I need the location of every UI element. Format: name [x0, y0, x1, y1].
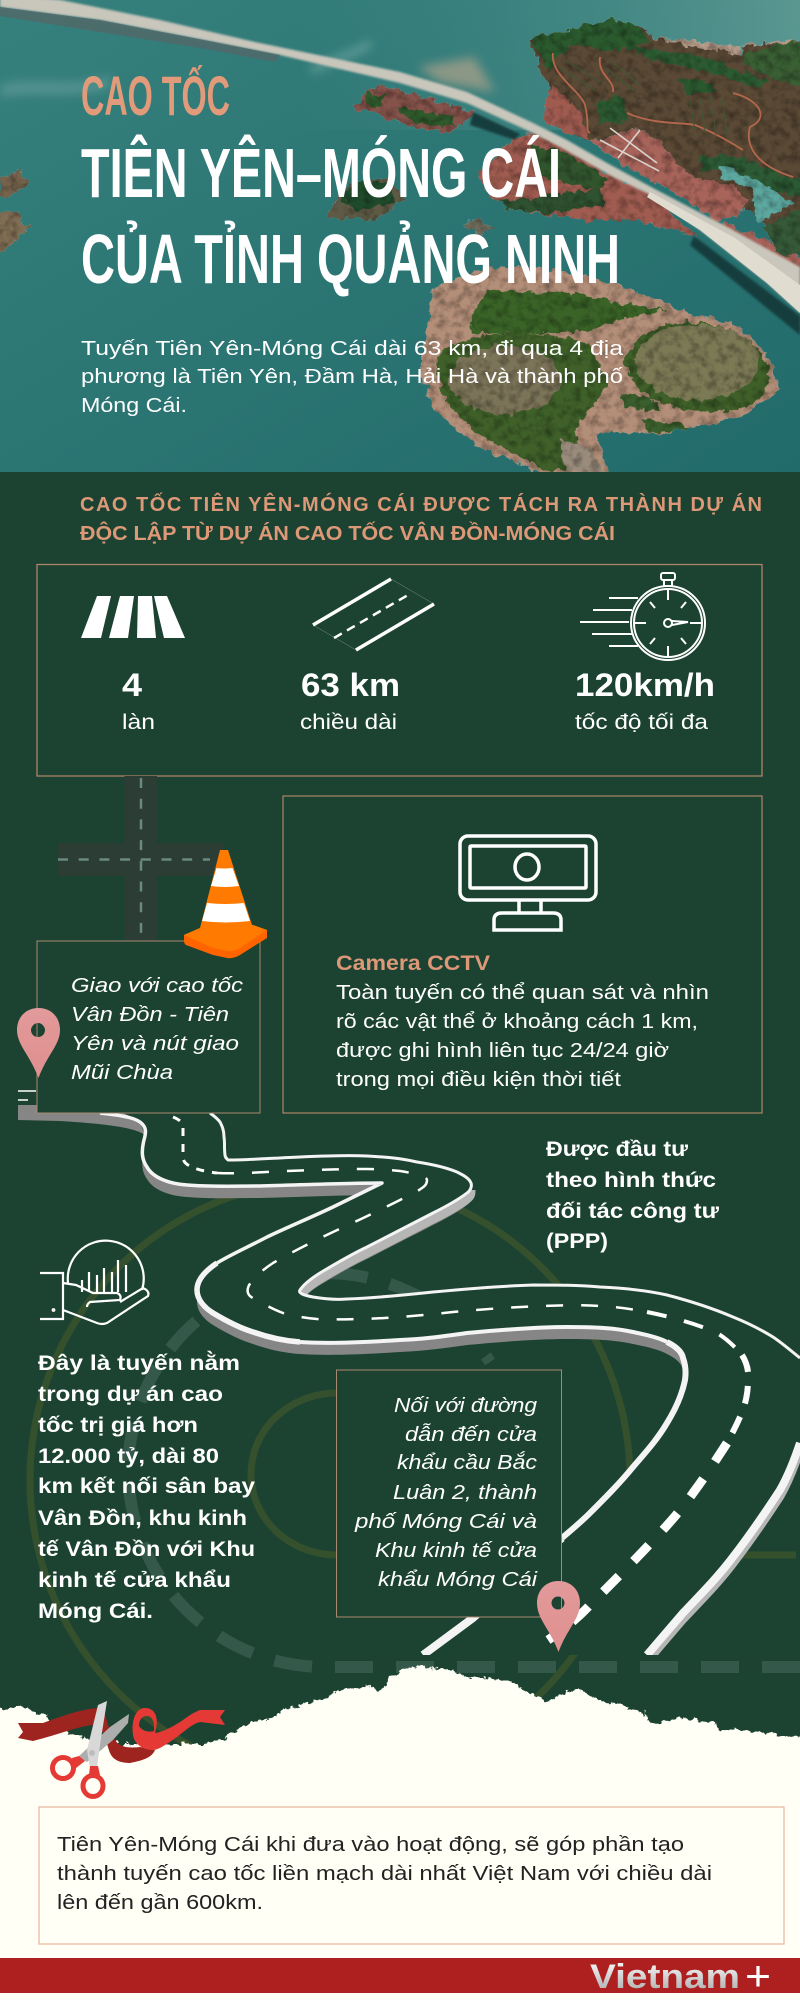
stat: lanes: làn: [122, 711, 155, 734]
hero intro text: Tuyến Tiên Yên-Móng Cái dài 63 km, đi qua 4 địa: [81, 338, 624, 360]
lower red island: [477, 133, 697, 237]
footer bar with logo: Vietnam: [590, 1958, 740, 1996]
panel: border gate connection: Khu kinh tế cửa: [375, 1540, 537, 1562]
panel: key figures: [37, 564, 762, 776]
project description: tế Vân Đồn với Khu: [38, 1538, 255, 1561]
footer bar with logo: +: [745, 1952, 771, 1999]
project description: trong dự án cao: [38, 1383, 223, 1406]
bridge deck: [0, 0, 800, 313]
road centre line: [173, 1117, 748, 1640]
hero intro text: Móng Cái.: [81, 395, 187, 417]
section heading: CAO TỐC TIÊN YÊN-MÓNG CÁI ĐƯỢC TÁCH RA THÀNH DỰ ÁN: [80, 492, 762, 516]
scissors: [52, 1701, 129, 1796]
decorative background circles and dashed ring: [30, 1180, 800, 1780]
land plot marks: [600, 128, 659, 171]
project description: 12.000 tỷ, dài 80: [38, 1445, 219, 1468]
panel: interchange note: [37, 941, 260, 1113]
panel: border gate connection: phố Móng Cái và: [354, 1511, 537, 1533]
road start lane ticks: [18, 1091, 36, 1100]
panel: border gate connection: khẩu Móng Cái: [378, 1569, 538, 1591]
panel: conclusion: [39, 1807, 784, 1944]
winding road illustration: [18, 1072, 800, 1667]
panel: border gate connection: dẫn đến cửa: [405, 1423, 537, 1446]
panel: border gate connection: Luân 2, thành: [393, 1482, 537, 1504]
road left start band: [18, 1110, 145, 1135]
icon: stopwatch: [580, 573, 705, 660]
icon: start location pin: [17, 1008, 60, 1078]
hero title: TIÊN YÊN–MÓNG CÁI: TIÊN YÊN–MÓNG CÁI: [81, 133, 561, 212]
stat: lanes: [122, 667, 155, 734]
road white edges: [100, 1113, 800, 1655]
panel: interchange note: Vân Đồn - Tiên: [71, 1004, 229, 1026]
section heading: ĐỘC LẬP TỪ DỰ ÁN CAO TỐC VÂN ĐỒN-MÓNG CÁI: [80, 521, 615, 545]
project description: [38, 1351, 255, 1623]
panel: conclusion: Tiên Yên-Móng Cái khi đưa vào hoạt động, sẽ góp phần tạo: [57, 1834, 684, 1856]
ribbon: [18, 1708, 225, 1763]
investment form note: Được đầu tư: [546, 1138, 689, 1161]
icon: lanes: [81, 596, 185, 638]
panel: camera CCTV: [283, 796, 762, 1113]
project description: kinh tế cửa khẩu: [38, 1569, 231, 1592]
project description: km kết nối sân bay: [38, 1475, 255, 1498]
stat: lanes: 4: [122, 667, 142, 703]
icon: road length: [313, 579, 434, 650]
footer bar with logo: [0, 1952, 800, 1999]
hero intro text: phương là Tiên Yên, Đầm Hà, Hải Hà và thành phố: [81, 366, 623, 388]
panel: border gate connection: Nối với đường: [394, 1395, 537, 1417]
stat: top speed: 120km/h: [575, 667, 715, 703]
investment form note: (PPP): [546, 1230, 608, 1253]
investment form note: theo hình thức: [546, 1169, 716, 1192]
camera description: được ghi hình liên tục 24/24 giờ: [336, 1040, 669, 1062]
stat: top speed: tốc độ tối đa: [575, 711, 708, 734]
hero intro text: [81, 338, 624, 417]
bridge shadows: [470, 112, 800, 335]
stat: length: chiều dài: [300, 711, 397, 734]
panel: conclusion: thành tuyến cao tốc liền mạch dài nhất Việt Nam với chiều dài: [57, 1863, 712, 1885]
panel: border gate connection: khẩu cầu Bắc: [397, 1451, 537, 1474]
panel: interchange note: Yên và nút giao: [71, 1033, 239, 1055]
stat: top speed: [575, 667, 715, 734]
bottom island: [420, 267, 780, 480]
small top island: [352, 83, 477, 133]
red earth right: [592, 127, 750, 220]
panel: conclusion: lên đến gần 600km.: [57, 1892, 263, 1914]
panel: interchange note: Giao với cao tốc: [71, 975, 243, 997]
mid islet: [327, 178, 406, 220]
stat: length: [300, 667, 400, 734]
icon: ribbon and scissors: [18, 1701, 225, 1796]
project description: Vân Đồn, khu kinh: [38, 1507, 247, 1530]
icon: hand holding chart: [40, 1241, 148, 1324]
project description: Móng Cái.: [38, 1600, 153, 1623]
camera description: trong mọi điều kiện thời tiết: [336, 1069, 622, 1091]
project description: Đây là tuyến nằm: [38, 1351, 240, 1375]
road surface: [124, 1114, 800, 1655]
left rocks: [0, 170, 30, 197]
camera description: rõ các vật thể ở khoảng cách 1 km,: [336, 1011, 698, 1033]
investment form note: [546, 1138, 720, 1253]
camera description: Toàn tuyến có thể quan sát và nhìn: [336, 982, 709, 1004]
investment form note: đối tác công tư: [546, 1200, 720, 1223]
hero title: CAO TỐC: CAO TỐC: [81, 64, 230, 127]
road crossing illustration: [58, 776, 223, 941]
hillside terraces: [560, 60, 728, 140]
lake: [720, 167, 793, 223]
stat: length: 63 km: [301, 667, 400, 703]
panel: interchange note: Mũi Chùa: [71, 1062, 173, 1084]
torn paper bottom section: [0, 1666, 800, 2000]
road side wall highlight: [300, 1190, 800, 1661]
hillside tracks: [553, 53, 793, 177]
icon: traffic cone: [184, 850, 267, 958]
camera description: [336, 982, 709, 1091]
panel: border gate connection: [336, 1370, 562, 1617]
heading: Camera CCTV: Camera CCTV: [336, 952, 490, 975]
section heading: [80, 492, 762, 545]
project description: tốc trị giá hơn: [38, 1414, 198, 1437]
icon: camera monitor: [460, 836, 596, 930]
hero aerial photo: [0, 0, 800, 480]
road side wall: [18, 1105, 682, 1368]
upper hill: [530, 16, 800, 226]
icon: end location pin: [537, 1581, 580, 1652]
